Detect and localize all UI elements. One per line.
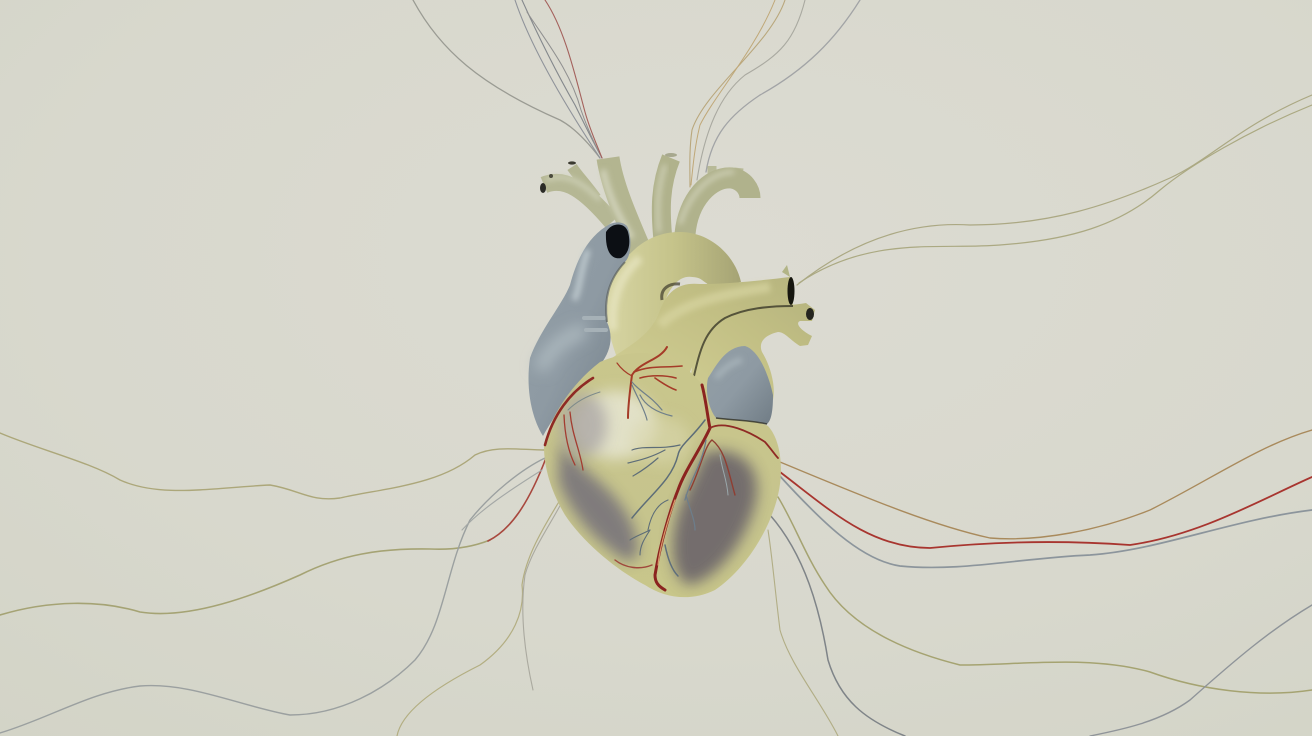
wires: right lower bundle — [768, 430, 1312, 736]
shading: right ventricle shadow — [673, 451, 757, 585]
grey right atrium — [529, 222, 631, 436]
pulmonary vein branches — [690, 303, 815, 400]
wires: top right bundle — [690, 0, 860, 187]
pulmonary trunk — [612, 265, 794, 376]
wires: left side — [0, 433, 562, 736]
vessels: left upper branches — [540, 158, 640, 250]
heart body — [544, 347, 781, 597]
wires: right upper bundle — [797, 95, 1312, 285]
heart — [529, 153, 815, 597]
wires: top left bundle — [413, 0, 602, 158]
coronary arteries — [545, 347, 778, 590]
atrium opening — [606, 224, 629, 258]
vessels: upper middle branches — [658, 153, 750, 240]
coronary veins — [628, 420, 705, 555]
grey left atrium — [707, 346, 773, 424]
aorta arch — [607, 232, 741, 360]
shading: left ventricle sheen and shadow — [573, 391, 657, 459]
